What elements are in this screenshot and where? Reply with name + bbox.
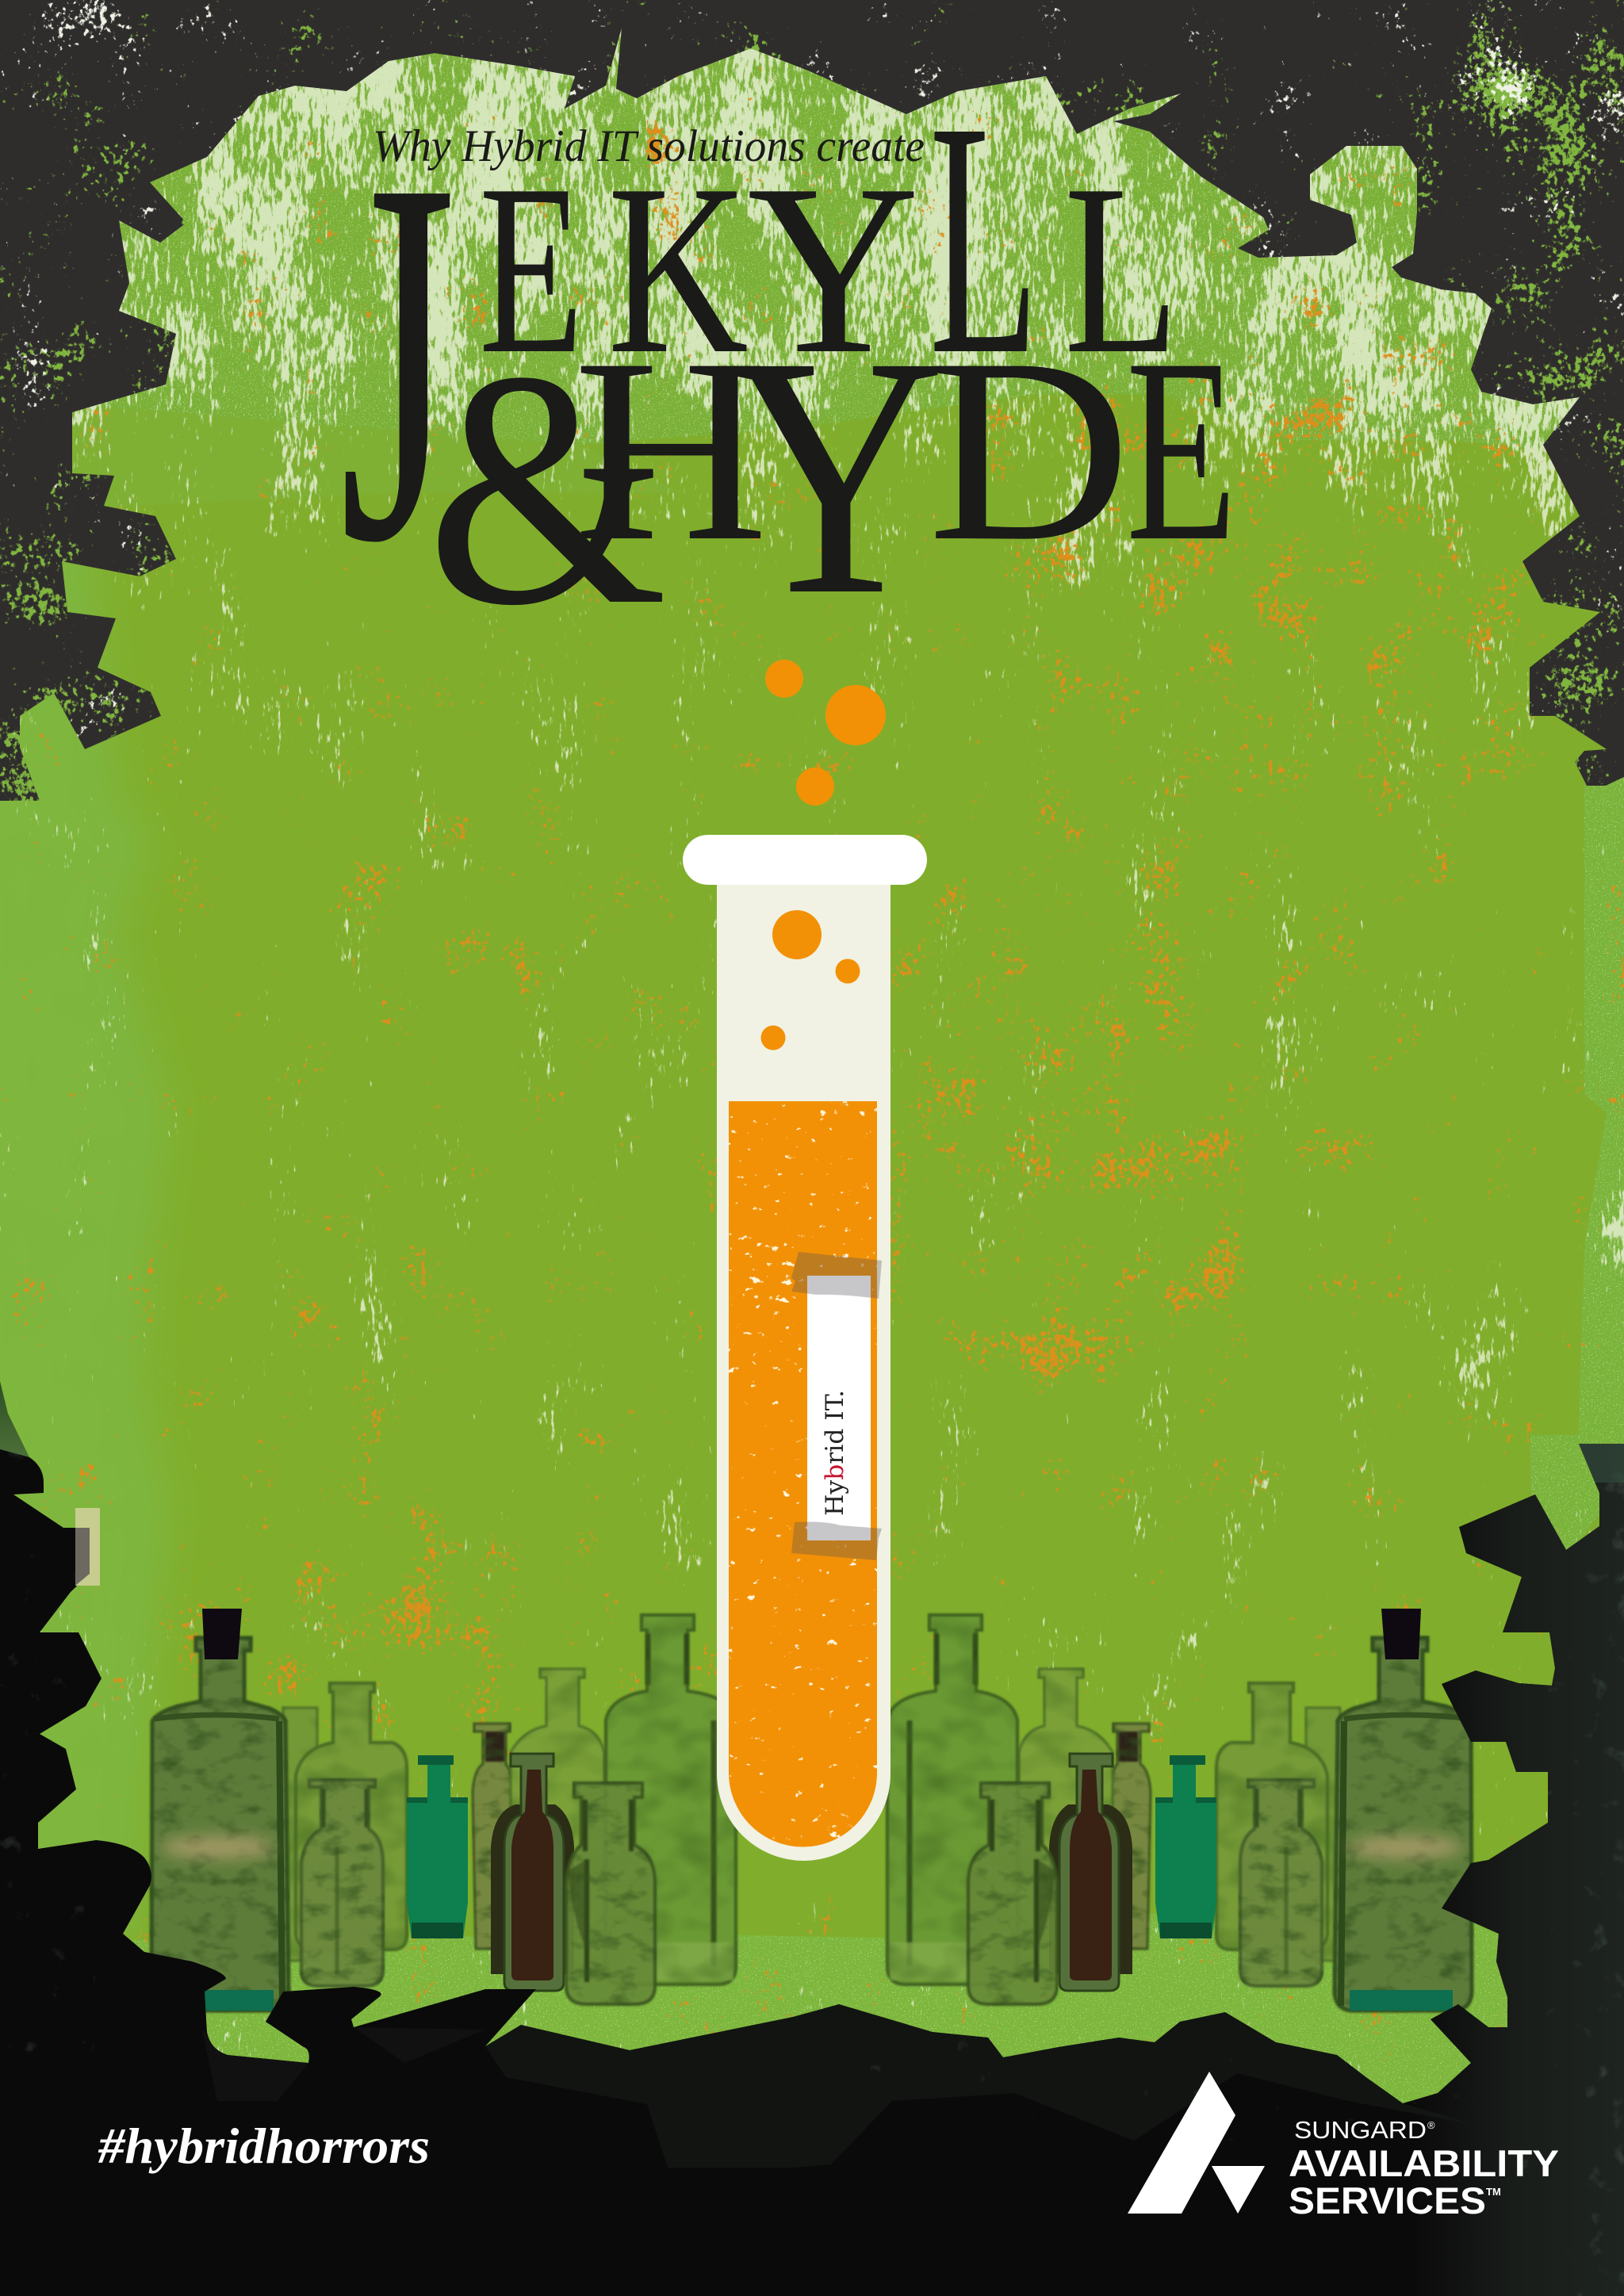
logo: Sungard Availability Services xyxy=(1128,2072,1559,2221)
heading: ampersand and Hyde xyxy=(427,285,1237,675)
logo wordmark: SERVICES xyxy=(1289,2179,1486,2221)
heading: Jekyll: Y xyxy=(747,134,920,404)
bottle: tall clear xyxy=(606,1615,736,1984)
heading: Jekyll xyxy=(339,53,1179,650)
bottles: left group xyxy=(151,1609,736,2011)
heading: Jekyll: L xyxy=(1064,134,1179,404)
dark frame: top xyxy=(0,0,1624,801)
liquid wear specks xyxy=(729,1101,877,1840)
bottom frame shading: ridges and mottling xyxy=(0,1427,1624,2296)
logo wordmark: ® xyxy=(1427,2119,1435,2131)
tape: top xyxy=(791,1252,882,1299)
heading: Jekyll: J xyxy=(339,70,456,650)
bottle: small, behind xyxy=(283,1683,407,1961)
heading: Jekyll: L xyxy=(929,53,1039,424)
bottle: wide mid xyxy=(296,1683,407,1950)
logo wordmark: SUNGARD xyxy=(1294,2116,1427,2144)
label paper xyxy=(807,1276,871,1540)
dark frame: bottom left wedge xyxy=(0,1381,29,1457)
heading: ampersand and Hyde: H xyxy=(573,304,768,595)
bubbles inside tube xyxy=(761,910,860,1050)
hashtag: #hybridhorrors xyxy=(98,2118,430,2174)
label text: Hybrid IT. xyxy=(821,1390,849,1516)
bottle: front round right xyxy=(566,1783,655,2004)
heading: ampersand and Hyde: D xyxy=(928,304,1131,595)
heading: Jekyll: K xyxy=(607,134,749,404)
test tube rim xyxy=(683,835,927,885)
heading: Jekyll: E xyxy=(479,134,584,404)
dark frame speckle: green and white wear xyxy=(0,0,1624,888)
title block xyxy=(339,53,1237,675)
tube label xyxy=(791,1252,882,1560)
bottle: wide pale behind xyxy=(511,1669,604,1972)
taped strip at left edge xyxy=(75,1508,100,1586)
logo mark xyxy=(1128,2072,1265,2214)
bottle: brown xyxy=(491,1754,574,1991)
bottle: large corked xyxy=(151,1609,289,2011)
bottles: right group (mirrored) xyxy=(887,1609,1472,2011)
test tube glass xyxy=(717,885,891,1861)
dark frame: bottom xyxy=(0,1444,1624,2296)
bottle: front round left xyxy=(301,1780,383,1986)
rising bubbles above tube xyxy=(765,660,886,806)
bottle: small dark neck xyxy=(473,1724,513,1949)
heading: ampersand and Hyde: & xyxy=(427,301,668,675)
test tube orange liquid xyxy=(729,1101,877,1847)
bottle: teal xyxy=(407,1755,468,1938)
logo wordmark xyxy=(1289,2116,1559,2221)
subtitle: Why Hybrid IT solutions create xyxy=(373,121,925,171)
heading: ampersand and Hyde: E xyxy=(1126,304,1237,595)
tape: bottom xyxy=(791,1522,882,1560)
heading: ampersand and Hyde: Y xyxy=(726,285,945,666)
logo wordmark: AVAILABILITY xyxy=(1289,2142,1559,2184)
logo wordmark: TM xyxy=(1486,2186,1501,2198)
